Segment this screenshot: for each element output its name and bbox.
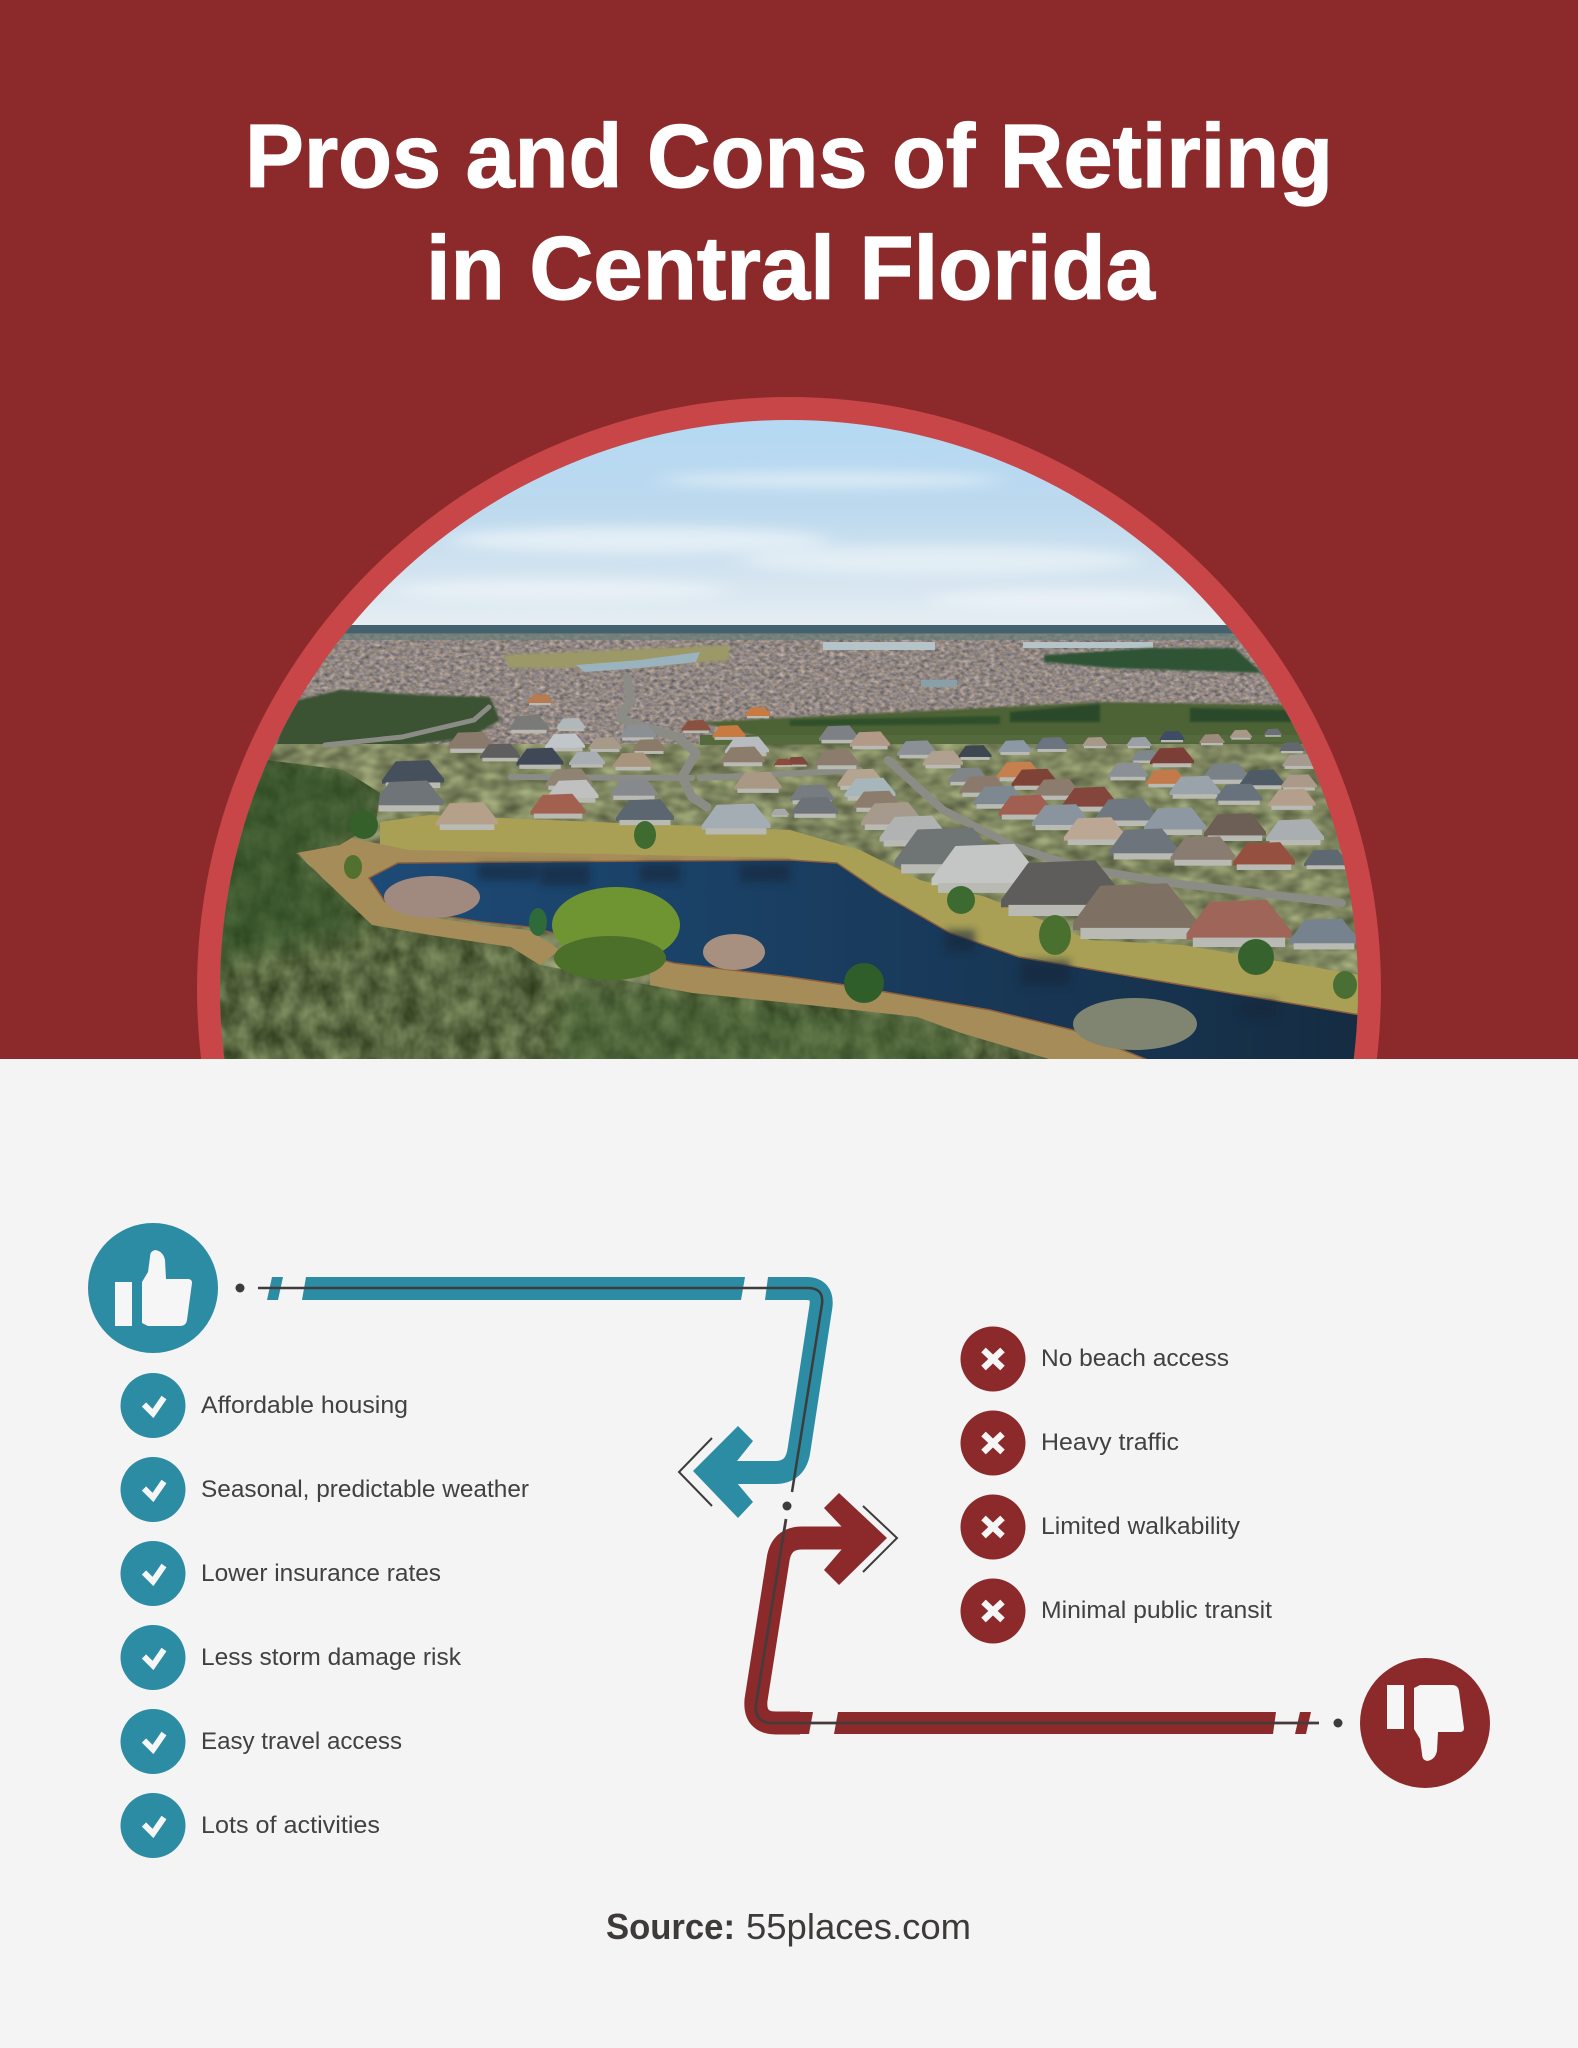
aerial photo of neighbourhood and lake bbox=[190, 410, 1380, 1070]
con: no beach access bbox=[960, 1326, 1229, 1392]
source line: 55places.com bbox=[746, 1906, 971, 1947]
pro: lots of activities bbox=[120, 1793, 380, 1858]
con: no beach access: No beach access bbox=[1041, 1345, 1229, 1372]
con: minimal public transit bbox=[960, 1578, 1272, 1644]
pro: seasonal weather bbox=[120, 1457, 529, 1522]
cons connector: red arrow bbox=[756, 1493, 1342, 1734]
icon: thumbs down bbox=[1360, 1658, 1490, 1788]
title bbox=[245, 107, 1333, 319]
con: limited walkability: Limited walkability bbox=[1041, 1513, 1240, 1540]
lawn strip bbox=[380, 815, 1360, 1018]
con: limited walkability bbox=[960, 1494, 1240, 1560]
pro: affordable housing bbox=[120, 1373, 408, 1438]
sky bbox=[351, 420, 1227, 626]
lake bbox=[369, 860, 1360, 1062]
horizon tree line bbox=[344, 625, 1234, 634]
source line: Source: bbox=[606, 1906, 735, 1947]
forest foreground bbox=[220, 760, 1048, 1059]
pro: lower insurance rates bbox=[120, 1541, 441, 1606]
con: heavy traffic bbox=[960, 1410, 1179, 1476]
lake shore bbox=[298, 837, 1160, 1062]
roads bbox=[325, 677, 1342, 903]
pro: lots of activities: Lots of activities bbox=[201, 1812, 380, 1839]
header background bbox=[0, 0, 1578, 1059]
distant ponds, fields and woods bbox=[275, 642, 1310, 748]
photo frame ring bbox=[197, 397, 1381, 1059]
pro: lower insurance rates: Lower insurance rates bbox=[201, 1560, 441, 1587]
pro: affordable housing: Affordable housing bbox=[201, 1392, 408, 1419]
tree reflections on lake bbox=[478, 864, 1276, 1018]
near town ground bbox=[200, 744, 1380, 1004]
pro: easy travel access bbox=[120, 1709, 402, 1774]
icon: thumbs up bbox=[88, 1223, 218, 1353]
light lower panel bbox=[0, 1059, 1578, 2048]
pros list bbox=[120, 1373, 529, 1858]
pro: seasonal weather: Seasonal, predictable weather bbox=[201, 1476, 529, 1503]
far town bbox=[274, 632, 1302, 746]
clouds bbox=[390, 472, 1190, 610]
con: minimal public transit: Minimal public transit bbox=[1041, 1597, 1272, 1624]
cons list bbox=[960, 1326, 1272, 1644]
pro: easy travel access: Easy travel access bbox=[201, 1728, 402, 1755]
pro: less storm damage risk: Less storm damage risk bbox=[201, 1644, 462, 1671]
houses bbox=[374, 694, 1358, 949]
pro: less storm damage risk bbox=[120, 1625, 462, 1690]
source line bbox=[606, 1906, 971, 1947]
con: heavy traffic: Heavy traffic bbox=[1041, 1429, 1179, 1456]
title: Pros and Cons of Retiring bbox=[245, 107, 1333, 207]
pros connector: teal arrow bbox=[236, 1277, 822, 1518]
title: in Central Florida bbox=[426, 219, 1156, 319]
trees bbox=[344, 811, 1357, 1050]
